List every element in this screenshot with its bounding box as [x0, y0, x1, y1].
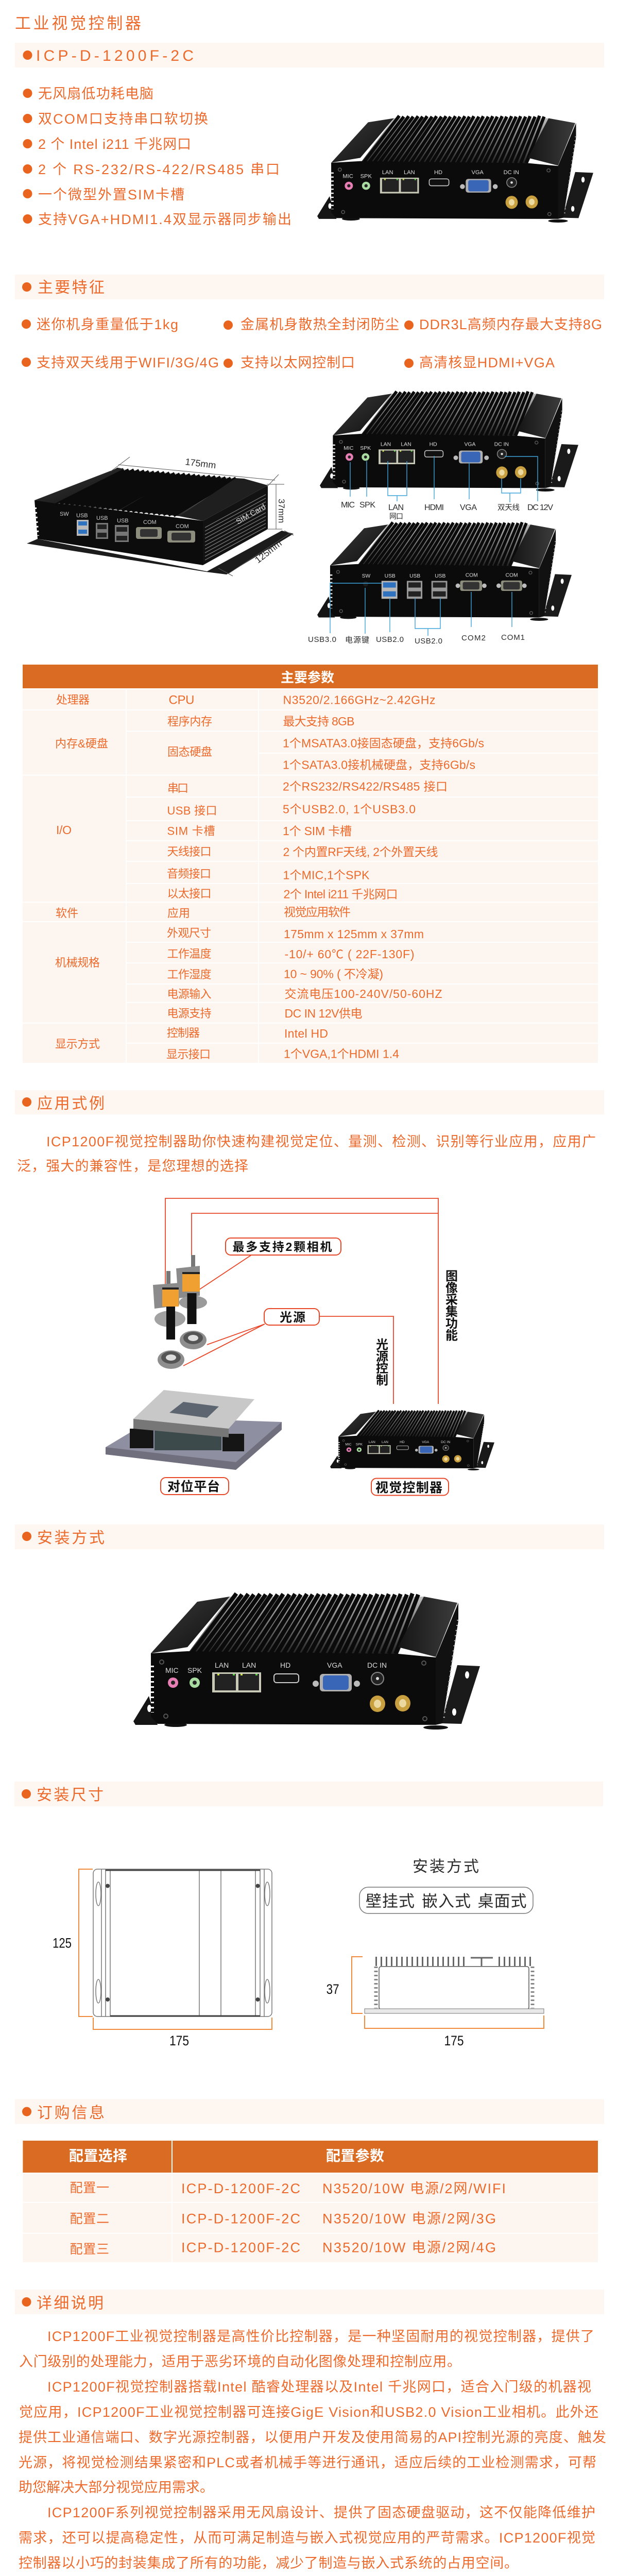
heading: 安装方式: 安装方式	[37, 1530, 105, 1547]
table second column: items: 电源输入	[167, 988, 211, 1001]
product photo: controller: MIC	[345, 1443, 352, 1446]
main feature grid: 支持以太网控制口	[241, 355, 355, 370]
table third column: values: 最大支持 8GB	[283, 715, 354, 728]
product photo: rear ports with callouts: COM	[506, 573, 518, 578]
product photo: front view	[317, 114, 593, 223]
paragraph 2: 觉应用，ICP1200F工业视觉控制器可连接GigE Vision和USB2.0 Vision工业相机。此外还	[19, 2404, 598, 2420]
table second column: items: 串口	[167, 782, 188, 794]
product photo: isometric with dimensions: 125mm	[253, 538, 284, 565]
label: alignment platform	[161, 1478, 229, 1495]
table third column: values: Intel HD	[284, 1027, 328, 1040]
table third column: values: 10 ~ 90% ( 不冷凝)	[284, 968, 383, 981]
product photo: isometric with dimensions: USB	[96, 515, 108, 521]
feature list: 双COM口支持串口软切换	[38, 111, 208, 127]
product photo: installation: LAN	[242, 1661, 256, 1669]
mounting method pill: 桌面式	[478, 1892, 526, 1910]
product photo: rear ports with callouts: COM2	[461, 634, 486, 642]
table third column: values: 交流电压100-240V/50-60HZ	[284, 987, 442, 1001]
table third column: values: 1个 SIM 卡槽	[283, 824, 352, 838]
table second column: items	[166, 693, 217, 1061]
callout: light source: 光源	[280, 1311, 305, 1325]
table third column: values: N3520/2.166GHz~2.42GHz	[283, 693, 436, 707]
product photo: isometric with dimensions	[27, 456, 294, 576]
table first column: categories: 机械规格	[55, 956, 100, 969]
product photo: front ports with callouts: DC 12V	[527, 503, 553, 512]
intro paragraph	[17, 1134, 596, 1174]
product photo: isometric with dimensions: COM	[176, 523, 189, 530]
icon: ring lights	[158, 1331, 207, 1369]
mounting method pill: 壁挂式	[366, 1892, 415, 1910]
row: config 3: 配置三	[70, 2242, 109, 2257]
drawing: front section with dimensions	[327, 1957, 544, 2048]
heading: 安装尺寸: 安装尺寸	[37, 1787, 104, 1804]
icon: cameras and lenses	[153, 1255, 207, 1340]
product photo: rear ports with callouts: USB2.0	[415, 637, 442, 646]
row: config 2: N3520/10W 电源/2网/3G	[322, 2211, 496, 2227]
mounting method pill	[359, 1887, 533, 1913]
paragraph 3: 需求，还可以提高稳定性，从而可满足制造与嵌入式视觉应用的严苛需求。ICP1200F视觉	[19, 2530, 595, 2546]
heading: 订购信息	[15, 2099, 604, 2124]
table header: 配置参数	[326, 2148, 384, 2164]
heading: 主要特征: 主要特征	[38, 279, 105, 296]
main feature grid: 金属机身散热全封闭防尘	[241, 317, 399, 332]
table third column: values: 2个 Intel i211 千兆网口	[283, 887, 398, 901]
product photo: front ports with callouts: VGA	[464, 442, 476, 448]
intro paragraph: ICP1200F视觉控制器助你快速构建视觉定位、量测、检测、识别等行业应用，应用广	[46, 1134, 596, 1149]
row: config 2: 配置二	[70, 2212, 109, 2226]
intro paragraph: 泛，强大的兼容性，是您理想的选择	[17, 1158, 248, 1174]
product photo: rear ports with callouts: COM1	[501, 633, 525, 642]
product photo: installation: VGA	[327, 1661, 342, 1669]
table second column: items: SIM 卡槽	[167, 824, 215, 838]
drawing: top view with dimensions: 125	[53, 1936, 72, 1951]
feature list	[23, 86, 291, 227]
product photo: controller: SPK	[356, 1443, 363, 1446]
table first column: categories: 内存&硬盘	[55, 737, 108, 750]
table third column: values: 175mm x 125mm x 37mm	[284, 927, 424, 941]
product photo: installation: HD	[280, 1661, 290, 1669]
row: config 2	[70, 2211, 496, 2227]
product photo: rear ports with callouts: USB	[385, 573, 396, 579]
table second column: items: 以太接口	[167, 887, 211, 900]
table: main parameters	[23, 665, 598, 1063]
product photo: installation: DC IN	[367, 1661, 387, 1669]
table second column: items: 程序内存	[167, 715, 212, 728]
table second column: items: 电源支持	[167, 1007, 211, 1020]
product photo: isometric with dimensions: USB	[117, 518, 129, 524]
product photo: front view: VGA	[471, 170, 484, 176]
table first column: categories: 处理器	[56, 693, 90, 706]
heading: model name	[15, 43, 604, 67]
table third column: values: 2 个内置RF天线, 2个外置天线	[283, 845, 438, 858]
table third column: values: 5个USB2.0, 1个USB3.0	[283, 803, 416, 816]
product photo: isometric with dimensions: 37mm	[277, 499, 286, 523]
callout: light source	[264, 1309, 319, 1325]
heading: mounting methods: 安装方式	[413, 1858, 479, 1875]
table header	[23, 2141, 598, 2173]
paragraph 3: ICP1200F系列视觉控制器采用无风扇设计、提供了固态硬盘驱动，这不仅能降低维护	[47, 2505, 595, 2520]
table third column: values: 1个SATA3.0接机械硬盘，支持6Gb/s	[283, 758, 475, 772]
product photo: front view: LAN	[404, 170, 415, 176]
table header	[23, 665, 598, 688]
product photo: isometric with dimensions: 175mm	[185, 456, 217, 470]
product photo: front ports with callouts: 双天线	[497, 503, 520, 512]
feature list: 2 个 Intel i211 千兆网口	[38, 137, 191, 152]
paragraph 1	[19, 2329, 594, 2369]
main feature grid	[22, 317, 602, 370]
main feature grid: 迷你机身重量低于1kg	[37, 317, 178, 332]
application diagram	[106, 1198, 494, 1495]
table second column: items: 天线接口	[167, 845, 211, 858]
callout: cameras: 最多支持2颗相机	[233, 1240, 332, 1253]
product photo: rear ports with callouts: 电源键	[345, 636, 369, 645]
product photo: installation	[133, 1592, 480, 1730]
row: config 3: ICP-D-1200F-2C	[181, 2240, 300, 2256]
product photo: rear ports with callouts	[308, 522, 572, 646]
product photo: rear ports with callouts: USB3.0	[308, 635, 336, 644]
product photo: front ports with callouts: MIC	[344, 446, 354, 451]
table second column: items: CPU	[169, 693, 195, 707]
table second column: items: USB 接口	[167, 804, 217, 817]
product photo: isometric with dimensions: SW	[60, 511, 69, 517]
product photo: front ports with callouts	[320, 392, 578, 520]
table third column: values: 视觉应用软件	[284, 905, 351, 919]
table first column: categories: I/O	[56, 823, 72, 837]
drawing: front section with dimensions: 175	[444, 2033, 464, 2048]
heading: 安装方式	[15, 1524, 604, 1549]
product photo: front view: MIC	[342, 174, 353, 180]
main feature grid: 高清核显HDMI+VGA	[419, 355, 555, 370]
table: configurations	[23, 2141, 598, 2262]
product photo: isometric with dimensions: SIM Card	[235, 502, 267, 526]
product photo: front view: SPK	[360, 174, 372, 180]
label: alignment platform: 对位平台	[167, 1479, 220, 1494]
product photo: front view: HD	[434, 170, 442, 176]
product photo: rear ports with callouts: SW	[362, 573, 371, 579]
product photo: controller: HD	[400, 1440, 405, 1444]
paragraph 2: 助您解决大部分视觉应用需求。	[19, 2480, 214, 2495]
table header: 配置选择	[69, 2148, 127, 2164]
mounting method pill: 嵌入式	[422, 1892, 471, 1910]
table first column: categories: 显示方式	[55, 1038, 100, 1050]
product photo: controller: VGA	[422, 1440, 430, 1444]
product photo: front view: DC IN	[504, 170, 519, 176]
table second column: items: 工作温度	[167, 947, 211, 960]
table first column: categories: 软件	[56, 907, 78, 920]
product photo: isometric with dimensions: USB	[76, 513, 88, 519]
title: 工业视觉控制器	[15, 14, 141, 32]
heading: 详细说明: 详细说明	[37, 2295, 104, 2312]
product photo: rear ports with callouts: COM	[466, 573, 478, 578]
product photo: controller: LAN	[369, 1440, 375, 1444]
product photo: front ports with callouts: MIC	[341, 501, 355, 510]
product photo: front ports with callouts: DC IN	[494, 442, 509, 448]
product photo: installation: SPK	[187, 1666, 202, 1674]
product photo: installation: MIC	[165, 1666, 179, 1674]
product photo: front ports with callouts: LAN	[401, 442, 411, 448]
product photo: rear ports with callouts: USB	[435, 573, 446, 579]
table first column: categories	[55, 693, 108, 1050]
heading: 应用式例: 应用式例	[37, 1095, 105, 1112]
product photo: front ports with callouts: HD	[430, 442, 437, 448]
callout: cameras	[226, 1238, 341, 1255]
row: config 3: N3520/10W 电源/2网/4G	[322, 2240, 496, 2256]
product photo: front view: LAN	[382, 170, 393, 176]
heading: 订购信息: 订购信息	[37, 2105, 105, 2122]
table second column: items: 应用	[167, 907, 190, 920]
table second column: items: 音频接口	[167, 868, 211, 880]
product photo: front ports with callouts: VGA	[460, 503, 477, 512]
feature list: 支持VGA+HDMI1.4双显示器同步输出	[38, 212, 291, 227]
feature list: 一个微型外置SIM卡槽	[38, 187, 184, 202]
product photo: front ports with callouts: SPK	[359, 501, 375, 510]
product photo: controller	[330, 1410, 494, 1470]
label: vision controller: 视觉控制器	[375, 1481, 442, 1495]
table second column: items: 外观尺寸	[167, 926, 211, 940]
drawing: front section with dimensions: 37	[327, 1981, 339, 1997]
table header: 主要参数	[281, 670, 334, 685]
row: config 1: ICP-D-1200F-2C	[181, 2181, 300, 2196]
heading: 详细说明	[15, 2290, 604, 2314]
table second column: items: 显示接口	[166, 1048, 211, 1061]
paragraph 2: 光源，将视觉检测结果紧密和PLC或者机械手等进行通讯，适应后续的工业检测需求，可帮	[19, 2455, 596, 2470]
product photo: controller: LAN	[382, 1440, 388, 1444]
row: config 2: ICP-D-1200F-2C	[181, 2211, 300, 2227]
table third column: values: 1个VGA,1个HDMI 1.4	[284, 1047, 399, 1060]
product photo: rear ports with callouts: USB2.0	[376, 635, 404, 644]
heading: 安装尺寸	[14, 1782, 603, 1806]
row: config 1	[70, 2181, 506, 2196]
paragraph 2: 提供工业通信端口、数字光源控制器，以便用户开发及使用简易的API控制光源的亮度、触发	[19, 2430, 606, 2445]
paragraph 1: 入门级别的处理能力，适用于恶劣环境的自动化图像处理和控制应用。	[19, 2354, 461, 2369]
drawing: top view with dimensions	[53, 1869, 272, 2048]
heading: 应用式例	[15, 1090, 604, 1114]
row: config 3	[70, 2240, 496, 2257]
feature list: 2 个 RS-232/RS-422/RS485 串口	[38, 162, 280, 177]
table third column: values: -10/+ 60℃ ( 22F-130F)	[284, 947, 414, 961]
table third column: values: 2个RS232/RS422/RS485 接口	[283, 780, 448, 793]
row: config 1: 配置一	[70, 2181, 109, 2195]
product photo: front ports with callouts: 网口	[389, 512, 403, 520]
product photo: rear ports with callouts: USB	[409, 573, 420, 579]
vertical label: image capture: 图像采集功能	[445, 1269, 458, 1343]
product photo: front ports with callouts: SPK	[360, 446, 371, 451]
paragraph 2: ICP1200F视觉控制器搭载Intel 酷睿处理器以及Intel 千兆网口，适合入门级的机器视	[47, 2379, 591, 2395]
table third column: values	[283, 693, 484, 1060]
drawing: top view with dimensions: 175	[169, 2033, 189, 2048]
paragraph 3	[19, 2505, 595, 2571]
product photo: installation: LAN	[215, 1661, 229, 1669]
main feature grid: 支持双天线用于WIFI/3G/4G	[37, 355, 219, 370]
table second column: items: 固态硬盘	[167, 745, 212, 758]
feature list: 无风扇低功耗电脑	[38, 86, 153, 101]
vertical label: light control: 光源控制	[376, 1338, 388, 1387]
table second column: items: 工作湿度	[167, 968, 211, 981]
table third column: values: 1个MSATA3.0接固态硬盘，支持6Gb/s	[283, 737, 484, 750]
product photo: front ports with callouts: LAN	[388, 503, 404, 512]
red connection lines	[165, 1198, 438, 1404]
icon: alignment platform	[106, 1390, 282, 1470]
paragraph 3: 控制器以小巧的封装集成了所有的功能，减少了制造与嵌入式系统的占用空间。	[19, 2555, 518, 2571]
product photo: isometric with dimensions: COM	[143, 519, 157, 526]
table third column: values: DC IN 12V供电	[284, 1007, 363, 1020]
row: config 1: N3520/10W 电源/2网/WIFI	[322, 2181, 506, 2196]
product photo: front ports with callouts: LAN	[381, 442, 391, 448]
paragraph 1: ICP1200F工业视觉控制器是高性价比控制器，是一种坚固耐用的视觉控制器，提供了	[47, 2329, 594, 2344]
table second column: items: 控制器	[167, 1026, 200, 1040]
table third column: values: 1个MIC,1个SPK	[283, 869, 370, 882]
product photo: controller: DC IN	[441, 1440, 451, 1444]
heading: model name: ICP-D-1200F-2C	[36, 47, 194, 64]
main feature grid: DDR3L高频内存最大支持8G	[419, 317, 602, 332]
product photo: front ports with callouts: HDMI	[424, 503, 444, 512]
paragraph 2	[19, 2379, 606, 2495]
heading: 主要特征	[15, 275, 604, 299]
